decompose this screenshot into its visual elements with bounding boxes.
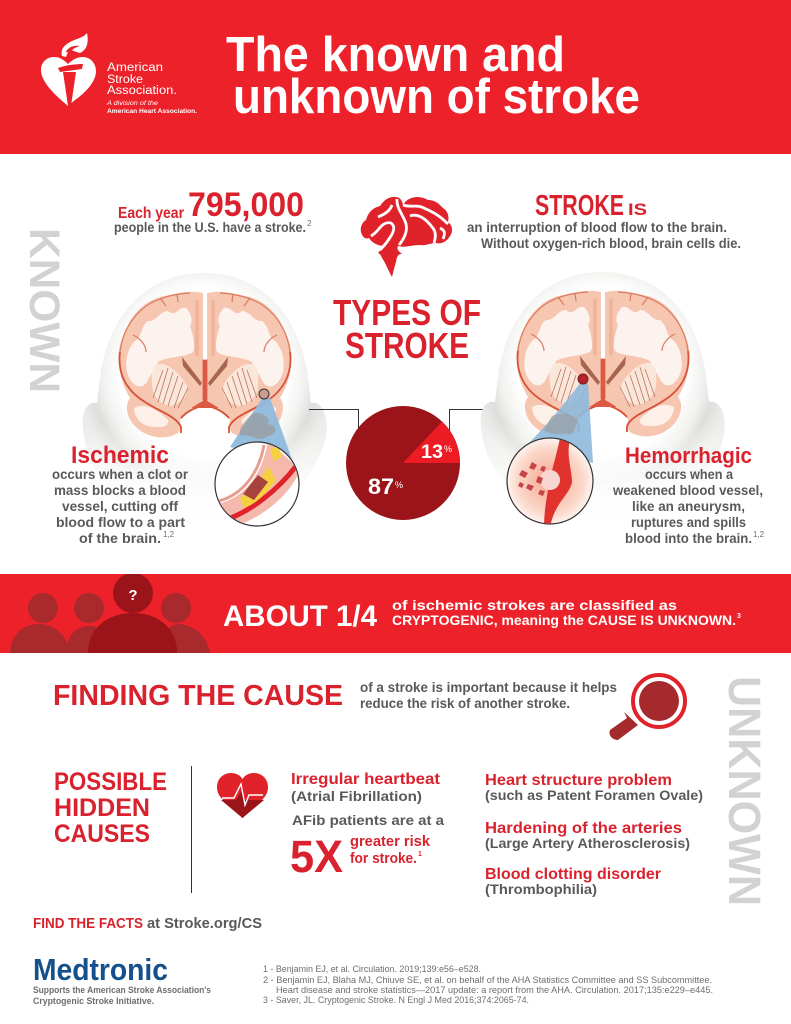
text: ischemic description: occurs when a clot or (52, 466, 189, 482)
heading: hemorrhagic: Hemorrhagic (625, 443, 752, 468)
head and brain: hemorrhagic (468, 272, 738, 529)
text: cryptogenic description (392, 597, 741, 628)
pie chart: stroke types (346, 406, 460, 520)
footnotes (263, 964, 713, 1005)
heading: possible hidden causes: CAUSES (54, 820, 150, 848)
call to action: find the facts: FIND THE FACTS (33, 915, 143, 932)
icon: magnifying glass (609, 675, 685, 740)
icon: heart with pulse (217, 773, 268, 818)
stat: 5X greater risk: greater risk (350, 834, 431, 850)
bleed callout: hemorrhagic (507, 374, 593, 530)
text: hemorrhagic description: occurs when a (645, 466, 733, 482)
title: unknown of stroke (233, 70, 640, 124)
cause: heart structure problem: Heart structure problem (485, 772, 672, 789)
footnotes: Heart disease and stroke statistics—2017 update: a report from the AHA. Circulation. 2017;135:e229–e445. (276, 985, 713, 995)
cause: hardening of the arteries (485, 820, 690, 851)
logo: American Stroke Association (41, 33, 197, 115)
text: ischemic description: vessel, cutting off (62, 498, 178, 514)
definition: stroke is: IS (628, 200, 647, 219)
stat: 5X greater risk: 5X (290, 831, 343, 882)
text: ischemic description: of the brain. (79, 530, 161, 546)
vertical label: UNKNOWN: UNKNOWN (719, 676, 770, 906)
pie chart: stroke types: % (444, 444, 452, 454)
definition: stroke is: STROKE (535, 190, 624, 222)
text: hemorrhagic description (612, 466, 765, 546)
stat: 795,000 people (114, 186, 312, 235)
cause: irregular heartbeat: (Atrial Fibrillation) (291, 788, 422, 804)
icon: people silhouette with question mark: ? (128, 587, 138, 604)
logo wordmark: Association. (107, 85, 177, 97)
cause: blood clotting disorder: Blood clotting disorder (485, 866, 661, 883)
stat: 795,000 people: 795,000 (188, 186, 304, 224)
logo wordmark: American (107, 62, 163, 74)
cause: irregular heartbeat: Irregular heartbeat (291, 771, 441, 788)
sponsor: Medtronic: Cryptogenic Stroke Initiative. (33, 996, 154, 1006)
text: hemorrhagic description: blood into the brain. (625, 530, 752, 546)
definition: stroke is: Without oxygen-rich blood, brain cells die. (481, 235, 741, 251)
cause: hardening of the arteries: (Large Artery Atherosclerosis) (485, 835, 690, 851)
cause: irregular heartbeat (291, 771, 444, 828)
icon: brain (361, 197, 452, 277)
clot callout: ischemic (214, 389, 300, 530)
text: finding the cause description (360, 679, 617, 711)
text: hemorrhagic description: weakened blood vessel, (612, 482, 763, 498)
title: types of stroke (333, 292, 481, 366)
text: ischemic description: mass blocks a blood (54, 482, 186, 498)
title: The known and (226, 28, 565, 82)
heading: possible hidden causes: HIDDEN (54, 794, 150, 822)
head and brain: ischemic (70, 273, 340, 530)
icon: heart and torch (41, 33, 96, 106)
heading: ischemic: Ischemic (71, 442, 169, 469)
connector: right (450, 410, 500, 437)
heading: possible hidden causes (54, 768, 167, 848)
heading: possible hidden causes: POSSIBLE (54, 768, 167, 796)
logo wordmark (106, 62, 197, 115)
cause: blood clotting disorder: (Thrombophilia) (485, 881, 597, 897)
text: cryptogenic description: 3 (737, 613, 741, 620)
heading: finding the cause: FINDING THE CAUSE (53, 680, 343, 712)
cause: hardening of the arteries: Hardening of the arteries (485, 820, 682, 837)
text: cryptogenic description: of ischemic strokes are classified as (392, 597, 677, 613)
footnotes: 1 - Benjamin EJ, et al. Circulation. 2019;139:e56–e528. (263, 964, 481, 974)
text: ischemic description: 1,2 (163, 530, 175, 539)
cause: heart structure problem: (such as Patent Foramen Ovale) (485, 787, 703, 803)
definition: stroke is (467, 190, 741, 251)
text: cryptogenic description: CRYPTOGENIC, meaning the CAUSE IS UNKNOWN. (392, 612, 736, 628)
text: ischemic description: blood flow to a part (56, 514, 185, 530)
header band (0, 0, 791, 154)
call to action: find the facts: at Stroke.org/CS (147, 915, 262, 932)
pie chart: stroke types: % (395, 480, 403, 490)
text: hemorrhagic description: ruptures and spills (631, 514, 746, 530)
cause: blood clotting disorder (485, 866, 661, 897)
text: finding the cause description: of a stroke is important because it helps (360, 679, 617, 695)
icon: people silhouette with question mark (10, 573, 210, 653)
vertical label: KNOWN: KNOWN (20, 228, 68, 393)
band: cryptogenic (0, 574, 791, 653)
text: ischemic description (52, 466, 189, 546)
title (226, 28, 640, 124)
cause: irregular heartbeat: AFib patients are at a (292, 812, 444, 828)
text: hemorrhagic description: like an aneurysm, (632, 498, 745, 514)
title: types of stroke: TYPES OF (333, 292, 481, 333)
footnotes: 2 - Benjamin EJ, Blaha MJ, Chiuve SE, et al. on behalf of the AHA Statistics Committee and SS Subcommittee. (263, 975, 712, 985)
stat: 5X greater risk: 1 (418, 851, 422, 858)
title: types of stroke: STROKE (345, 325, 469, 366)
stat: about 1/4: ABOUT 1/4 (223, 600, 377, 633)
stat: 795,000 people: Each year (118, 205, 184, 222)
call to action: find the facts (33, 915, 262, 932)
stat: 5X greater risk: for stroke. (350, 851, 417, 867)
sponsor: Medtronic (33, 952, 211, 1006)
stat: 5X greater risk (290, 831, 431, 882)
logo wordmark: Stroke (107, 74, 143, 86)
stat: 795,000 people: 2 (307, 219, 312, 228)
pie chart: stroke types: 87 (368, 474, 394, 499)
connector: left (309, 410, 358, 437)
pie chart: stroke types: 13 (421, 442, 443, 463)
sponsor: Medtronic: Supports the American Stroke Association's (33, 985, 211, 995)
definition: stroke is: an interruption of blood flow to the brain. (467, 219, 727, 235)
text: finding the cause description: reduce the risk of another stroke. (360, 695, 570, 711)
sponsor: Medtronic: Medtronic (33, 952, 168, 987)
divider (191, 766, 192, 893)
footnotes: 3 - Saver, JL. Cryptogenic Stroke. N Engl J Med 2016;374:2065-74. (263, 995, 529, 1005)
text: hemorrhagic description: 1,2 (753, 530, 765, 539)
logo wordmark: A division of the (106, 100, 158, 107)
cause: heart structure problem (485, 772, 703, 803)
stat: 795,000 people: people in the U.S. have a stroke. (114, 219, 306, 235)
logo wordmark: American Heart Association. (107, 108, 197, 115)
